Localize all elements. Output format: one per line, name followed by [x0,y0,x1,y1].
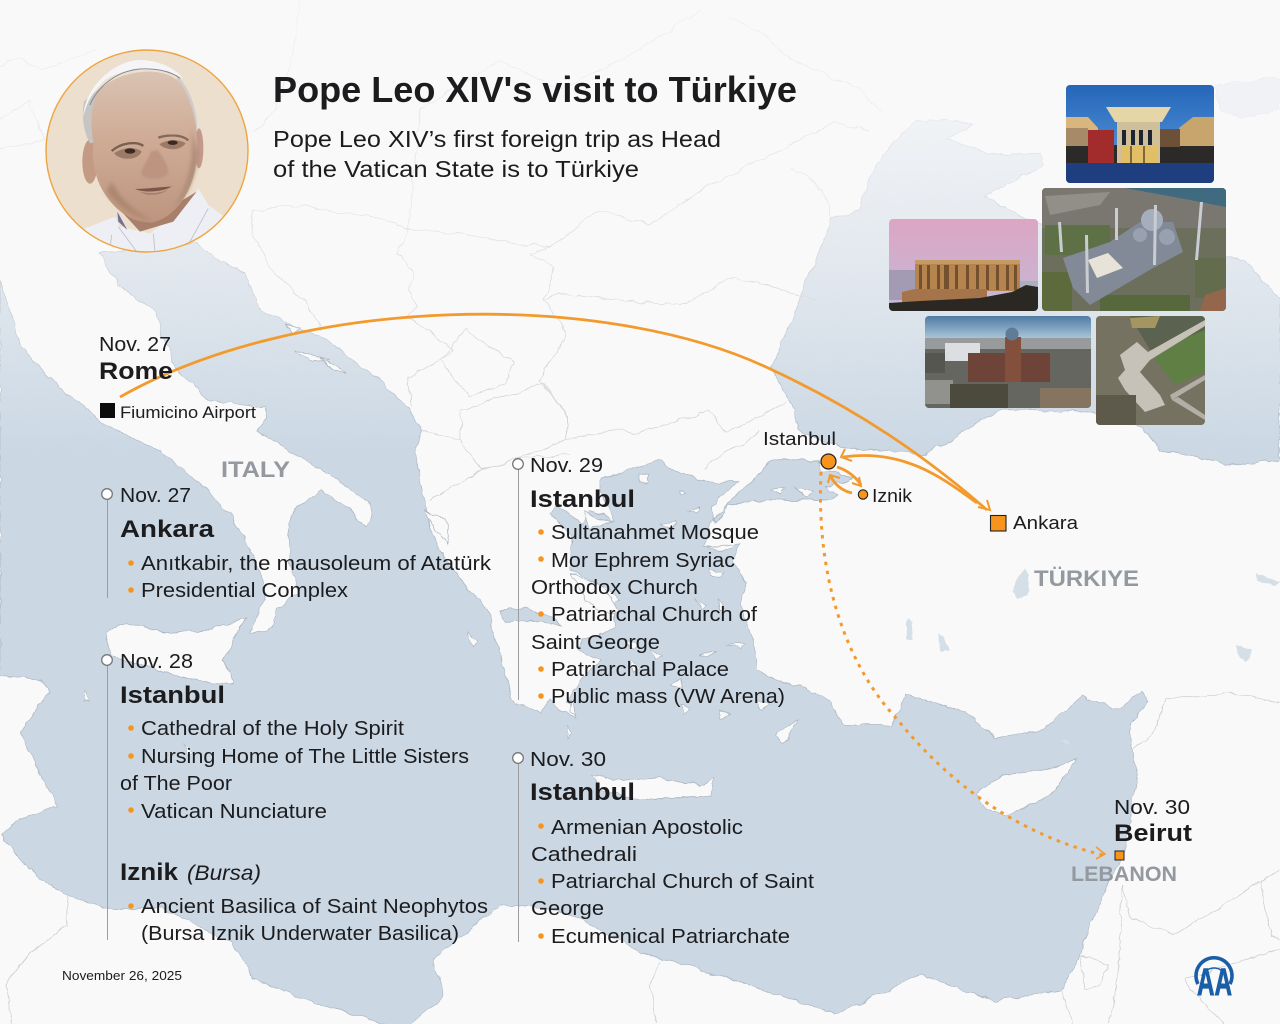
mouth [135,187,172,191]
ears [82,140,98,184]
marker: Ankara [990,513,1079,533]
sea: Azov and lakes [1214,78,1280,118]
photo: Patriarchal Church [925,316,1091,408]
itinerary: Nov. 27 Ankara [102,484,492,602]
itinerary: Nov. 29 Istanbul: Saint George [531,631,660,654]
itinerary: Nov. 30 Istanbul: Istanbul [530,779,635,806]
face [92,72,197,222]
marker: Rome: Rome [99,358,173,385]
photo: Sultanahmet Mosque [1042,188,1226,311]
sea: Black Sea [771,120,1280,465]
itinerary: Nov. 30 Istanbul: Armenian Apostolic [551,816,743,839]
route: Rome to Ankara [120,314,990,510]
photo: Ancient Basilica of Saint Neophytos [1096,316,1205,425]
marker: Istanbul [763,429,836,469]
hair [83,85,103,143]
itinerary: Nov. 29 Istanbul: Mor Ephrem Syriac [551,549,735,572]
sea: Marmara and Gulf of Corinth [500,458,853,625]
itinerary: Nov. 30 Istanbul: Patriarchal Church of Saint [551,870,814,893]
marker: Ankara: Ankara [1013,513,1079,533]
itinerary: Nov. 28 Istanbul and Iznik: Iznik [120,859,178,886]
itinerary: Nov. 29 Istanbul: Nov. 29 [530,454,603,477]
itinerary: Nov. 28 Istanbul and Iznik: (Bursa Iznik Underwater Basilica) [141,922,459,945]
itinerary: Nov. 29 Istanbul [513,454,785,708]
icon: Anadolu Agency logo: AA [1197,962,1232,1004]
itinerary: Nov. 28 Istanbul and Iznik: Vatican Nunciature [141,800,327,823]
marker: Rome: Nov. 27 [99,333,171,356]
itinerary: Nov. 28 Istanbul and Iznik: Ancient Basilica of Saint Neophytos [141,895,488,918]
islands [84,325,1077,815]
marker: Iznik: Iznik [872,486,913,506]
itinerary: Nov. 28 Istanbul and Iznik [102,650,488,945]
itinerary: Nov. 30 Istanbul [513,748,814,948]
itinerary: Nov. 28 Istanbul and Iznik: Nov. 28 [120,650,193,673]
photo: Presidential Complex [1066,85,1214,183]
route: Istanbul to Beirut (dotted) [820,472,1105,859]
subtitle: of the Vatican State is to Türkiye [273,156,639,182]
itinerary: Nov. 28 Istanbul and Iznik: Nursing Home of The Little Sisters [141,745,469,768]
arrowhead: at Ankara [978,500,990,510]
itinerary: Nov. 27 Ankara: Anıtkabir, the mausoleum of Atatürk [141,552,492,575]
route: Istanbul to Iznik and back [828,467,861,493]
subtitle: Pope Leo XIV’s first foreign trip as Head [273,126,721,152]
itinerary: Nov. 28 Istanbul and Iznik: (Bursa) [187,862,261,885]
itinerary: Nov. 30 Istanbul: Ecumenical Patriarchate [551,925,790,948]
marker: Beirut: Beirut [1114,820,1192,847]
itinerary: Nov. 28 Istanbul and Iznik: of The Poor [120,772,232,795]
itinerary: Nov. 30 Istanbul: George [531,897,604,920]
itinerary: Nov. 28 Istanbul and Iznik: Cathedral of the Holy Spirit [141,717,404,740]
itinerary: Nov. 29 Istanbul: Patriarchal Palace [551,658,729,681]
itinerary: Nov. 28 Istanbul and Iznik: Istanbul [120,682,225,709]
itinerary: Nov. 30 Istanbul: Cathedrali [531,843,637,866]
marker: Rome: Fiumicino Airport [120,403,256,422]
marker: Istanbul: Istanbul [763,429,836,449]
lakes [907,569,1280,746]
itinerary: Nov. 30 Istanbul: Nov. 30 [530,748,606,771]
eyes and brows [112,143,143,151]
zucchetto [83,60,183,117]
portrait of Pope Leo XIV [46,50,248,258]
itinerary: Nov. 29 Istanbul: Public mass (VW Arena) [551,685,785,708]
arrowhead: at Istanbul [841,449,852,461]
country label: Lebanon: LEBANON [1071,863,1177,886]
vestments [84,188,223,252]
itinerary: Nov. 29 Istanbul: Sultanahmet Mosque [551,521,759,544]
itinerary: Nov. 29 Istanbul: Istanbul [530,486,635,513]
itinerary: Nov. 29 Istanbul: Orthodox Church [531,576,698,599]
country label: Italy: ITALY [221,457,290,482]
country label: Türkiye: TÜRKIYE [1034,566,1139,591]
route: Ankara to Istanbul [841,449,977,503]
marker: Beirut: Nov. 30 [1114,796,1190,819]
subtitle [273,126,721,182]
date: November 26, 2025 [62,968,182,983]
arrowhead: at Beirut [1096,847,1105,859]
icon: Anadolu Agency logo [1196,958,1232,1004]
itinerary: Nov. 27 Ankara: Nov. 27 [120,484,191,507]
marker: Rome [99,333,256,422]
nose [141,150,168,179]
marker: Iznik [858,486,913,506]
itinerary: Nov. 29 Istanbul: Patriarchal Church of [551,603,757,626]
sea: Mediterranean, Adriatic and Aegean [0,243,1148,1024]
itinerary: Nov. 27 Ankara: Presidential Complex [141,579,349,602]
itinerary: Nov. 27 Ankara: Ankara [120,516,214,543]
photo: Anıtkabir [889,219,1038,311]
marker: Beirut [1114,796,1192,860]
title: Pope Leo XIV's visit to Türkiye [273,69,797,110]
